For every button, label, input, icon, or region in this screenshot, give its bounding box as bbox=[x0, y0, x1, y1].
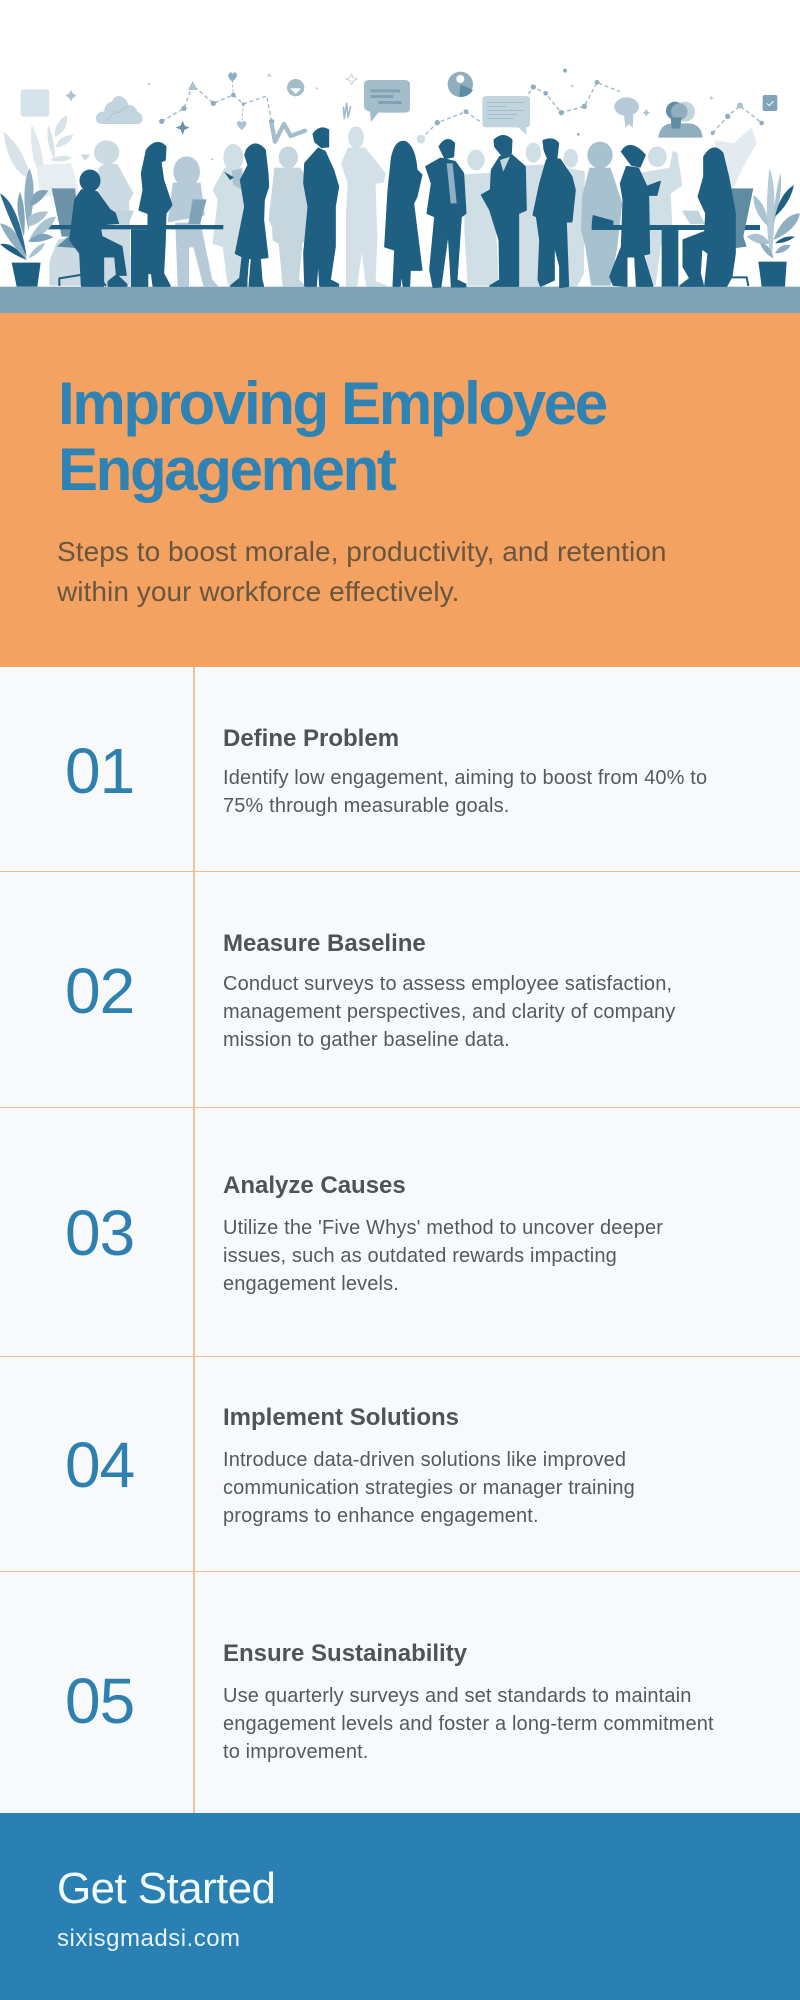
standing woman bbox=[132, 143, 172, 286]
step text: Ensure Sustainability: Use quarterly surveys and set standards to maintain bbox=[223, 1684, 691, 1706]
subtitle: within your workforce effectively. bbox=[57, 576, 460, 607]
man in suit bbox=[304, 128, 338, 286]
man with jacket bbox=[533, 139, 575, 287]
seated woman bbox=[680, 148, 735, 286]
divider: row 3 bbox=[0, 1356, 800, 1357]
step text: Define Problem: Identify low engagement, aiming to boost from 40% to bbox=[223, 767, 707, 789]
seated person bbox=[70, 170, 127, 286]
subtitle: Steps to boost morale, productivity, and retention bbox=[57, 536, 666, 567]
step text: Implement Solutions: Introduce data-driven solutions like improved bbox=[223, 1448, 626, 1470]
step text: Implement Solutions bbox=[223, 1448, 635, 1526]
step text: Measure Baseline: mission to gather baseline data. bbox=[223, 1029, 510, 1051]
step number 03: 03 bbox=[65, 1197, 134, 1269]
step text: Define Problem bbox=[223, 767, 707, 817]
office chair bbox=[52, 188, 106, 286]
panel: steps background bbox=[0, 667, 800, 1813]
divider: row 1 bbox=[0, 871, 800, 872]
step text: Define Problem: 75% through measurable goals. bbox=[223, 795, 509, 817]
woman with long dark hair in dress bbox=[385, 142, 422, 286]
icon: check box bbox=[763, 95, 777, 111]
footer url: sixisgmadsi.com bbox=[57, 1925, 241, 1952]
background person: woman with clipboard bbox=[213, 145, 245, 285]
network graph with dashed lines bbox=[148, 72, 318, 160]
icon: speech bubble left part bbox=[364, 80, 410, 122]
header illustration: office team silhouettes bbox=[0, 68, 800, 313]
step number 01: 01 bbox=[65, 735, 134, 807]
office chair bbox=[713, 188, 753, 286]
step heading: Implement Solutions: Implement Solutions bbox=[223, 1404, 459, 1431]
step number 05: 05 bbox=[65, 1665, 134, 1737]
man in suit facing left bbox=[482, 136, 526, 286]
icon: cloud with trend line bbox=[96, 96, 143, 124]
left half of the scene bbox=[0, 72, 410, 287]
desk bbox=[42, 225, 223, 287]
icon: rounded square bbox=[21, 89, 49, 117]
laptop bbox=[682, 211, 705, 224]
icon: sparkle bbox=[65, 90, 77, 102]
step text: Ensure Sustainability: to improvement. bbox=[223, 1740, 368, 1762]
icon: squiggle bbox=[272, 124, 305, 142]
divider: row 4 bbox=[0, 1571, 800, 1572]
background people bbox=[465, 143, 682, 286]
right half of the scene bbox=[385, 69, 800, 287]
step text: Ensure Sustainability: engagement levels and foster a long-term commitment bbox=[223, 1712, 714, 1734]
icon: sparkle outline bbox=[346, 74, 357, 85]
column divider bbox=[193, 667, 194, 1813]
step text: Measure Baseline bbox=[223, 973, 676, 1051]
woman holding phone bbox=[610, 146, 660, 286]
subtitle bbox=[57, 536, 666, 607]
step number 02: 02 bbox=[65, 955, 134, 1027]
icon: smiley bbox=[287, 79, 304, 96]
step heading: Ensure Sustainability: Ensure Sustainability bbox=[223, 1640, 467, 1667]
desk bbox=[592, 215, 760, 287]
step text: Measure Baseline: Conduct surveys to assess employee satisfaction, bbox=[223, 973, 672, 995]
right potted plant bbox=[747, 168, 800, 287]
man hand on chin bbox=[426, 140, 466, 287]
floor band bbox=[0, 287, 800, 314]
network graphs bbox=[417, 69, 764, 143]
title: Engagement bbox=[58, 436, 395, 503]
background foliage bbox=[715, 127, 757, 188]
step heading: Analyze Causes: Analyze Causes bbox=[223, 1172, 406, 1199]
background person: man arms crossed bbox=[342, 127, 387, 286]
step heading: Measure Baseline: Measure Baseline bbox=[223, 930, 426, 957]
step text: Analyze Causes: Utilize the 'Five Whys' method to uncover deeper bbox=[223, 1216, 663, 1238]
background foliage bbox=[3, 115, 80, 197]
icon: badge bubble bbox=[614, 97, 639, 128]
step text: Implement Solutions: communication strategies or manager training bbox=[223, 1476, 635, 1498]
panel: footer bbox=[0, 1813, 800, 2000]
step text: Measure Baseline: management perspectives, and clarity of company bbox=[223, 1001, 675, 1023]
step heading: Define Problem: Define Problem bbox=[223, 725, 399, 752]
woman in dress bbox=[231, 144, 268, 286]
left potted plant bbox=[0, 168, 56, 287]
laptop on desk bbox=[115, 211, 134, 224]
background person: center bbox=[269, 147, 308, 286]
background person: woman with laptop bbox=[168, 157, 217, 286]
step text: Analyze Causes bbox=[223, 1216, 663, 1294]
title: Improving Employee bbox=[58, 370, 606, 437]
icon: pie chart bbox=[448, 72, 473, 97]
icon: scribble bbox=[343, 103, 351, 118]
divider: row 2 bbox=[0, 1107, 800, 1108]
icon: avatar bbox=[658, 102, 703, 138]
step text: Analyze Causes: issues, such as outdated rewards impacting bbox=[223, 1244, 617, 1266]
icon: report speech bubble bbox=[482, 96, 530, 135]
title bbox=[58, 370, 606, 503]
footer heading: Get Started bbox=[57, 1864, 275, 1913]
panel: orange title header bbox=[0, 313, 800, 667]
background person: curly hair bbox=[50, 141, 133, 285]
step text: Analyze Causes: engagement levels. bbox=[223, 1272, 399, 1294]
clipboard bbox=[224, 168, 243, 190]
laptop bbox=[188, 199, 207, 224]
step number 04: 04 bbox=[65, 1429, 134, 1501]
step text: Ensure Sustainability bbox=[223, 1684, 714, 1762]
step text: Implement Solutions: programs to enhance engagement. bbox=[223, 1504, 539, 1526]
background woman bbox=[582, 142, 622, 285]
